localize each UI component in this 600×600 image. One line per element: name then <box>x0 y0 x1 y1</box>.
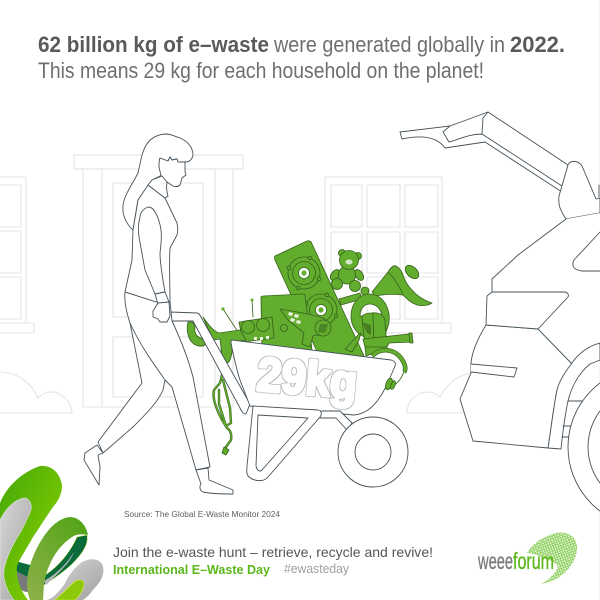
lower body <box>460 325 572 448</box>
woman <box>84 134 233 494</box>
car <box>400 112 600 527</box>
title: 2022. <box>510 32 565 57</box>
title <box>38 32 565 83</box>
face <box>159 157 186 192</box>
upper body <box>492 213 600 343</box>
left cloud <box>0 372 72 413</box>
title: were generated globally in <box>273 32 505 57</box>
grey strip <box>44 552 74 585</box>
frame <box>247 406 321 481</box>
torso <box>125 185 178 302</box>
tray <box>231 340 395 415</box>
tail light <box>486 292 568 329</box>
hair <box>123 134 193 230</box>
olive ribbon <box>27 517 88 600</box>
dark green band right <box>40 535 87 586</box>
rim <box>588 387 600 507</box>
front shoe <box>196 468 233 494</box>
door <box>74 155 243 407</box>
cutter <box>345 333 361 352</box>
e-waste pile <box>187 241 432 455</box>
right cloud <box>407 373 471 413</box>
dark green band left <box>15 561 34 580</box>
rear pillar <box>559 161 600 219</box>
collar <box>148 176 168 198</box>
wheelbarrow <box>170 312 408 487</box>
grey inner ribbon <box>0 498 31 600</box>
back shoe <box>84 445 103 485</box>
top green ribbon <box>0 466 62 600</box>
hand <box>153 302 170 322</box>
lower grey ribbon <box>47 559 103 600</box>
tyre <box>568 367 600 527</box>
stove panel <box>274 241 365 358</box>
lime highlight <box>55 580 84 600</box>
headphones <box>372 350 405 391</box>
wheel arch <box>548 343 600 449</box>
background: houses and clouds <box>0 155 471 413</box>
arm <box>138 207 165 294</box>
handles <box>170 312 250 414</box>
title: 62 billion kg of e–waste <box>38 32 269 57</box>
dark grey centre left <box>14 570 30 592</box>
cuff <box>155 292 169 304</box>
teddy bear <box>328 250 366 292</box>
left window <box>0 177 34 333</box>
campaign slogan: Join the e-waste hunt – retrieve, recycle and revive! <box>113 544 433 560</box>
rod <box>339 293 362 305</box>
frame strut <box>320 411 352 430</box>
tailgate <box>400 112 568 192</box>
weee wordmark: weee <box>477 548 513 574</box>
29kg label: 29kg <box>255 347 359 409</box>
wheel <box>338 417 408 487</box>
plug <box>222 447 229 455</box>
campaign logo <box>0 466 103 600</box>
title: This means 29 kg for each household on the planet! <box>38 58 484 83</box>
leaf emblem <box>527 532 577 584</box>
WEEE Forum logo <box>477 532 577 584</box>
horn and robot arm <box>351 263 432 356</box>
right window <box>317 177 451 333</box>
source note: Source: The Global E-Waste Monitor 2024 <box>124 509 280 519</box>
tool with rod <box>187 307 246 363</box>
reflector <box>471 364 517 377</box>
trousers and legs <box>98 292 210 470</box>
right edge hairline <box>598 0 600 600</box>
radio <box>239 298 274 342</box>
hashtag: #ewasteday <box>284 562 350 576</box>
chassis struts <box>562 401 586 437</box>
campaign name: International E–Waste Day <box>113 563 270 577</box>
forum wordmark: forum <box>513 548 554 574</box>
drill <box>280 309 331 347</box>
tablet <box>261 294 312 350</box>
power cord <box>213 363 231 447</box>
side window <box>573 232 600 271</box>
